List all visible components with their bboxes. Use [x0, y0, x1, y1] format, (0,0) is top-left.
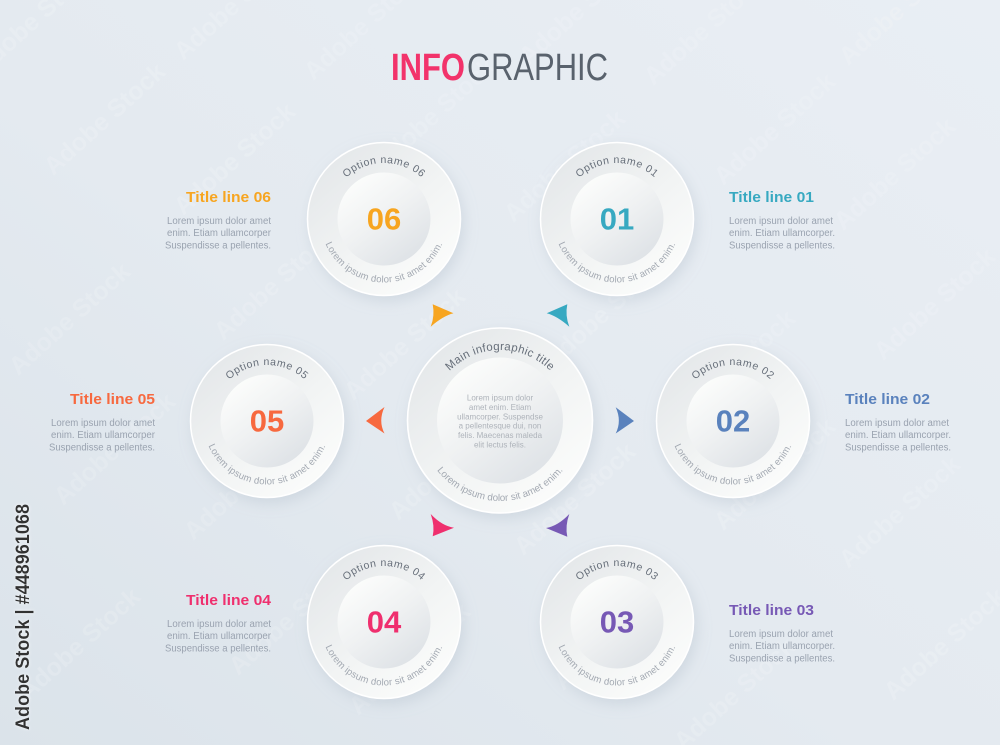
- panel: option 01: Option name 01: [576, 157, 658, 177]
- panel: option 02: Option name 02: [692, 359, 774, 379]
- panel: option 04: Option name 04: [343, 560, 425, 580]
- text block: option 04: [165, 592, 272, 654]
- central circle body text: Lorem ipsum dolor: [467, 394, 533, 402]
- central circle body text: [457, 394, 543, 449]
- text block: option 03: Title line 03: [729, 602, 814, 619]
- panel: option 05: Option name 05: [226, 359, 308, 378]
- text block: option 03: [729, 602, 835, 664]
- text block: option 05: [49, 391, 156, 454]
- text block: option 05: Title line 05: [70, 391, 155, 408]
- watermark pattern: Adobe Stock: [869, 242, 1000, 366]
- panel: option 03: Lorem ipsum dolor sit amet enim.: [558, 644, 675, 686]
- panel: option 06: Option name 06: [343, 157, 425, 176]
- text block: option 06: Suspendisse a pellentes.: [165, 240, 271, 252]
- text block: option 06: Title line 06: [186, 189, 271, 206]
- watermark pattern: Adobe Stock: [39, 57, 171, 181]
- watermark pattern: Adobe Stock: [669, 304, 801, 428]
- panel: option 05: Lorem ipsum dolor sit amet enim.: [208, 444, 325, 484]
- central circle body text: ullamcorper. Suspendse: [457, 412, 543, 421]
- watermark pattern: Adobe Stock: [384, 402, 516, 526]
- central circle lower caption: Lorem ipsum dolor sit amet enim.: [438, 466, 562, 501]
- central circle body text: amet enim. Etiam: [469, 403, 531, 412]
- panel: option 04: 04: [367, 604, 402, 640]
- text block: option 02: Lorem ipsum dolor amet: [845, 418, 949, 429]
- text block: option 01: Lorem ipsum dolor amet: [729, 216, 833, 227]
- watermark pattern: Adobe Stock: [169, 97, 301, 221]
- text block: option 04: Title line 04: [186, 592, 272, 609]
- text block: option 06: enim. Etiam ullamcorper: [167, 228, 272, 239]
- arrow: amber to option 06: [431, 304, 454, 327]
- panel: option 04: Lorem ipsum dolor sit amet enim.: [326, 644, 442, 686]
- panel: option 03: 03: [600, 604, 634, 640]
- text block: option 02: [845, 391, 951, 454]
- panel: option 02: [656, 344, 815, 505]
- text block: option 05: enim. Etiam ullamcorper: [51, 430, 156, 441]
- text block: option 06: Lorem ipsum dolor amet: [167, 216, 271, 227]
- watermark pattern: Adobe Stock: [829, 112, 961, 236]
- arrow: teal to option 01: [547, 304, 569, 327]
- panel: option 03: [540, 544, 698, 706]
- watermark pattern: Adobe Stock: [369, 52, 501, 176]
- watermark pattern: Adobe Stock: [224, 557, 356, 681]
- watermark pattern: Adobe Stock: [344, 597, 476, 721]
- central circle heading: Main infographic title: [444, 343, 554, 370]
- central circle body text: elit lectus felis.: [474, 440, 526, 449]
- title: INFO: [391, 47, 465, 89]
- text block: option 06: [165, 189, 272, 252]
- watermark pattern: Adobe Stock: [14, 582, 146, 706]
- watermark pattern: Adobe Stock: [339, 282, 471, 406]
- text block: option 01: [729, 189, 835, 252]
- text block: option 05: Lorem ipsum dolor amet: [51, 418, 155, 429]
- panel: central circle: [406, 327, 598, 520]
- panel: option 06: 06: [367, 202, 401, 236]
- watermark pattern: Adobe Stock: [499, 104, 631, 228]
- panel: option 01: [540, 142, 698, 303]
- stock id label: Adobe Stock | #448961068: [13, 504, 34, 730]
- watermark pattern: Adobe Stock: [209, 222, 341, 346]
- text block: option 05: Suspendisse a pellentes.: [49, 442, 155, 454]
- watermark pattern: Adobe Stock: [49, 387, 181, 511]
- watermark pattern: Adobe Stock: [179, 422, 311, 546]
- text block: option 01: Suspendisse a pellentes.: [729, 240, 835, 252]
- arrow: blue to option 02: [616, 407, 634, 434]
- title: [391, 47, 608, 89]
- central circle body text: a pellentesque dui, non: [459, 422, 541, 431]
- watermark pattern: Adobe Stock: [709, 412, 841, 536]
- text block: option 01: enim. Etiam ullamcorper.: [729, 228, 835, 239]
- panel: option 01: 01: [600, 202, 634, 236]
- panel: option 06: Lorem ipsum dolor sit amet enim.: [326, 242, 442, 282]
- text block: option 01: Title line 01: [729, 189, 814, 206]
- panel: option 02: Lorem ipsum dolor sit amet enim.: [674, 444, 791, 484]
- panel: option 05: [190, 344, 348, 504]
- panel: option 02: 02: [716, 404, 750, 438]
- panel: option 03: Option name 03: [576, 560, 658, 580]
- text block: option 03: Suspendisse a pellentes.: [729, 654, 835, 664]
- watermark pattern: Adobe Stock: [4, 257, 136, 381]
- panel: option 05: 05: [250, 404, 284, 438]
- panel: option 01: Lorem ipsum dolor sit amet enim.: [558, 242, 675, 282]
- watermark pattern: Adobe Stock: [509, 437, 641, 561]
- text block: option 04: enim. Etiam ullamcorper: [167, 631, 272, 642]
- arrow: purple to option 03: [546, 514, 569, 537]
- arrow: pink to option 04: [431, 514, 454, 536]
- watermark pattern: Adobe Stock: [709, 67, 841, 191]
- text block: option 02: enim. Etiam ullamcorper.: [845, 430, 951, 441]
- watermark pattern: Adobe Stock: [539, 250, 671, 374]
- text block: option 02: Title line 02: [845, 391, 930, 408]
- title: GRAPHIC: [467, 47, 608, 89]
- watermark pattern: Adobe Stock: [549, 572, 681, 696]
- text block: option 02: Suspendisse a pellentes.: [845, 442, 951, 454]
- text block: option 04: Lorem ipsum dolor amet: [167, 619, 271, 630]
- watermark pattern: Adobe Stock: [834, 450, 966, 574]
- central circle body text: felis. Maecenas maleda: [458, 431, 543, 440]
- panel: option 04: [306, 544, 465, 705]
- text block: option 03: enim. Etiam ullamcorper.: [729, 641, 835, 652]
- text block: option 04: Suspendisse a pellentes.: [165, 644, 271, 654]
- panel: option 06: [306, 142, 466, 303]
- arrow: orange-red to option 05: [366, 407, 384, 434]
- text block: option 03: Lorem ipsum dolor amet: [729, 629, 833, 640]
